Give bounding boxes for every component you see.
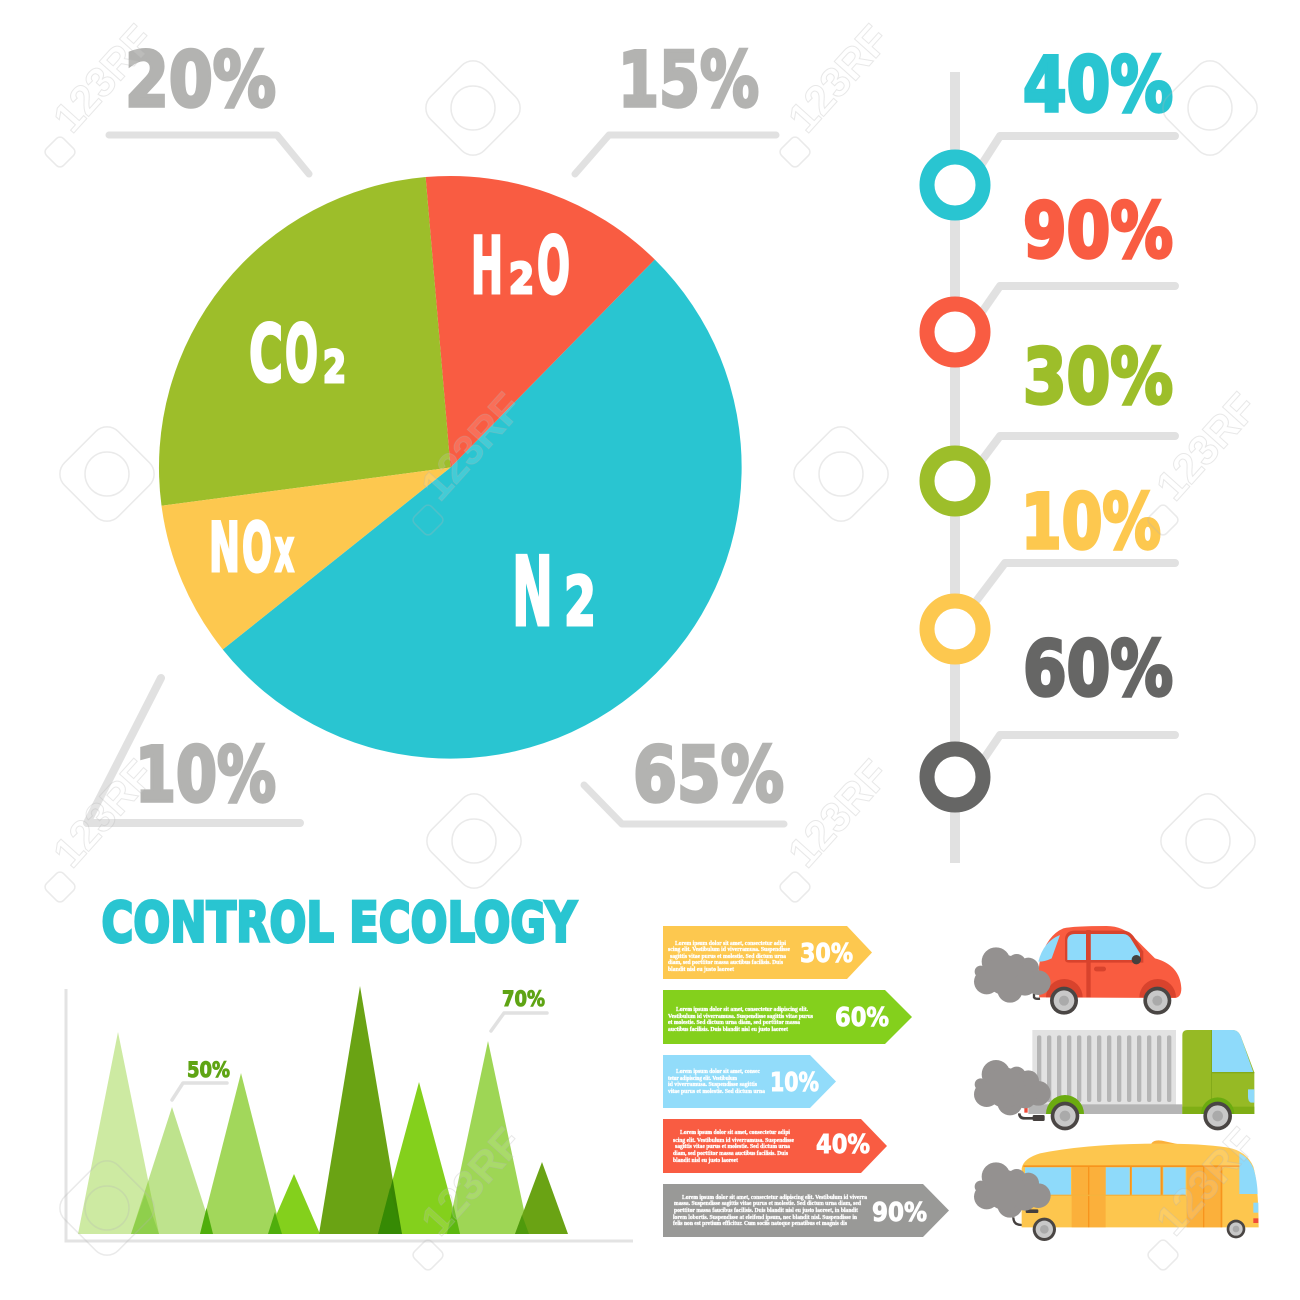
icon: truck [1019, 1030, 1254, 1130]
arrow: 10%: id viverramusa. Suspendisse sagittis [668, 1082, 758, 1088]
pie slice: H2O [426, 176, 655, 467]
label: N2: N [512, 538, 553, 648]
arrow: 60%: et molestie. Sed dictum urna diam, sed porttitor massa [668, 1020, 800, 1026]
callout: 70%: 70% [502, 987, 545, 1011]
arrow: 30%: blandit nisl eu justo laoreet [668, 967, 734, 973]
label: H2O [471, 222, 570, 312]
watermark text: 123RF [412, 1119, 531, 1244]
timeline item: 40% [927, 40, 1175, 213]
pie callout: 65%: 65% [633, 730, 784, 819]
label: CO2: 2 [323, 342, 346, 393]
callout: 50% [172, 1058, 230, 1100]
triangle 1 [78, 1032, 159, 1234]
timeline item: 10%: 10% [1021, 477, 1161, 566]
arrow: 30% [663, 926, 872, 979]
arrow: 60%: Lorem ipsum dolor sit amet, consectetur adipiscing elit. [676, 1007, 808, 1013]
icon: car [1034, 926, 1181, 1015]
icon: car smoke [974, 947, 1051, 1003]
watermark text: 123RF [779, 16, 898, 141]
arrow: 60%: auctibus facilisis. Duis blandit nisl eu justo laoreet [668, 1027, 788, 1033]
arrow: 90%: porttitor massa faucibus facilisis. Duis blandit nisl eu justo laoreet, in blandit [674, 1208, 858, 1214]
callout: 70% [491, 987, 547, 1031]
pie callout: 15% [575, 35, 776, 174]
arrow: 40%: Lorem ipsum dolor sit amet, consectetur adipi [680, 1130, 790, 1136]
arrow: 40%: scing elit. Vestibulum id viverramusa. Suspendisse [673, 1138, 794, 1144]
label: NOx: O [242, 509, 272, 588]
arrow: 60%: Vestibulum id viverramusa. Suspendisse sagittis vitae purus [668, 1014, 814, 1020]
pie chart [159, 176, 742, 759]
timeline item: 90%: 90% [1023, 186, 1173, 275]
icon: truck smoke [974, 1060, 1051, 1115]
chart axes [66, 989, 633, 1241]
timeline item: 40%: 40% [1023, 40, 1173, 129]
watermark text: 123RF [1147, 1119, 1266, 1244]
pie slice: NOx [162, 468, 450, 649]
label: NOx [209, 509, 294, 588]
pie chart: x [275, 516, 294, 586]
label: H2O: 2 [509, 254, 534, 303]
label: NOx: N [209, 509, 240, 588]
vehicles [974, 926, 1259, 1241]
arrow: 10% [663, 1055, 836, 1108]
pie slice: N2 [223, 260, 742, 759]
arrow: 90%: Lorem ipsum dolor sit amet, consectetur adipiscing elit. Vestibulum id viverra [682, 1195, 867, 1201]
triangle overlaps [131, 1188, 529, 1234]
arrow: 90%: lorem lobortis. Suspendisse at eleifend ipsum, nec blandit nisl. Suspendisse in [673, 1215, 858, 1221]
arrow: 40%: 40% [816, 1130, 870, 1160]
triangle 5 [319, 986, 402, 1234]
arrow: 60%: 60% [835, 1003, 889, 1033]
watermark text: 123RF [44, 16, 163, 141]
watermark text: 123RF [44, 751, 163, 876]
arrow: 30%: Lorem ipsum dolor sit amet, consectetur adipi [675, 941, 786, 947]
timeline item: 30%: 30% [1023, 332, 1173, 421]
label: H2O: H [471, 222, 503, 312]
arrow: 30%: 30% [800, 939, 853, 969]
triangle 8 [515, 1162, 568, 1234]
pie callout: 20%: 20% [125, 35, 276, 124]
watermark text: 123RF [1147, 384, 1266, 509]
arrow: 90%: 90% [872, 1198, 927, 1228]
watermark text: 123RF [779, 751, 898, 876]
arrow: 90%: massa. Suspendisse sagittis vitae purus et molestie. Sed dictum urna diam, sed [674, 1201, 862, 1207]
timeline item: 90% [927, 186, 1175, 360]
triangle 4 [268, 1174, 320, 1234]
timeline item: 30% [927, 332, 1175, 509]
pie callout: 10% [87, 678, 300, 823]
triangle 2 [131, 1107, 213, 1234]
triangle chart [66, 986, 633, 1241]
triangle 3 [200, 1073, 282, 1234]
label: CO2: C [249, 310, 283, 400]
pie chart: O [537, 222, 570, 312]
arrow: 10%: 10% [770, 1068, 819, 1098]
arrow: 10%: Lorem ipsum dolor sit amet, consec [676, 1069, 760, 1075]
arrow: 40%: diam, sed porttitor massa auctibus facilisis. Duis [673, 1151, 789, 1157]
label: CO2 [249, 310, 346, 400]
watermark text: 123RF [412, 384, 531, 509]
arrow: 30%: scing elit. Vestibulum id viverramusa. Suspendisse [668, 947, 790, 953]
timeline item: 10% [927, 477, 1175, 657]
label: N2: 2 [564, 563, 596, 642]
callout: 50%: 50% [187, 1058, 230, 1082]
pie callout: 20% [109, 35, 309, 174]
timeline item: 60% [927, 624, 1175, 805]
timeline panel [927, 40, 1175, 863]
triangle 6 [378, 1082, 460, 1234]
arrow: 40% [663, 1119, 887, 1173]
pie slice: CO2 [159, 177, 451, 506]
pie callout: 65% [584, 730, 784, 824]
arrow: 90% [663, 1184, 949, 1237]
triangle 7 [447, 1041, 529, 1234]
arrow: 30%: diam, sed porttitor massa auctibus facilisis. Duis [668, 960, 784, 966]
arrow: 40%: sagittis vitae purus et molestie. Sed dictum urna [675, 1144, 790, 1150]
timeline item: 60%: 60% [1023, 624, 1173, 713]
arrow: 40%: blandit nisl eu justo laoreet [673, 1158, 738, 1164]
arrow bars [663, 926, 949, 1237]
pie callout: 15%: 15% [618, 35, 759, 124]
label: CO2: O [285, 310, 318, 400]
icon: bus smoke [974, 1162, 1051, 1218]
icon: bus [1013, 1140, 1259, 1241]
pie callout: 10%: 10% [135, 730, 276, 819]
arrow: 60% [663, 990, 912, 1044]
title: CONTROL ECOLOGY [102, 890, 577, 954]
arrow: 90%: felis non est pretium efficitur. Cum sociis natoque penatibus et magnis dis [673, 1221, 848, 1227]
arrow: 30%: sagittis vitae purus et molestie. Sed dictum urna [670, 954, 786, 960]
arrow: 10%: vitae purus et molestie. Sed dictum urna [668, 1089, 765, 1095]
arrow: 10%: tetur adipiscing elit. Vestibulum [668, 1076, 737, 1082]
